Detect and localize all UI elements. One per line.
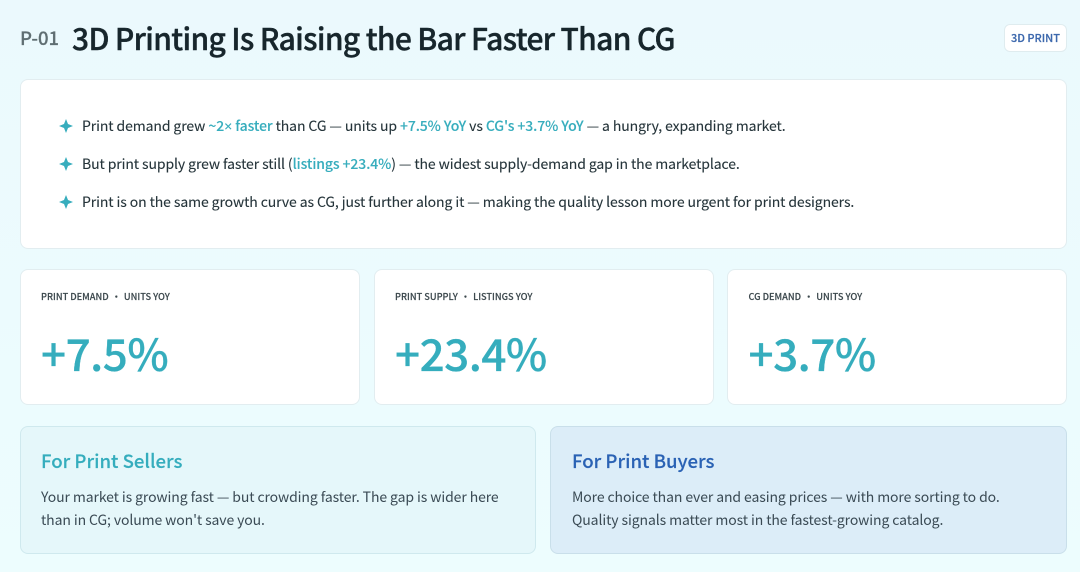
label: CG DEMAND • UNITS YOY xyxy=(748,288,862,302)
panel: key takeaways xyxy=(20,79,1067,249)
panel: for print sellers xyxy=(20,426,536,554)
title: 3D Printing Is Raising the Bar Faster Than CG xyxy=(72,15,675,59)
panel: for print buyers xyxy=(550,426,1067,554)
page code: P-01 xyxy=(20,25,59,51)
bullet 2: But print supply grew faster still (listings +23.4%) — the widest supply-demand gap in the marketplace. xyxy=(82,154,740,174)
body text xyxy=(41,486,499,530)
label: PRINT SUPPLY • LISTINGS YOY xyxy=(395,288,532,302)
bullet 3: Print is on the same growth curve as CG, just further along it — making the quality lesson more urgent for print designers. xyxy=(82,192,854,212)
stat card: print demand xyxy=(20,269,360,405)
value: +23.4% xyxy=(395,320,547,384)
badge: 3D print xyxy=(1004,24,1067,52)
body text: More choice than ever and easing prices — with more sorting to do. xyxy=(572,486,1000,506)
badge: 3D print: 3D PRINT xyxy=(1011,30,1060,46)
stat card: print supply xyxy=(374,269,714,405)
stat card: CG demand xyxy=(727,269,1067,405)
icon: sparkle xyxy=(59,195,73,209)
body text: than in CG; volume won't save you. xyxy=(41,510,265,530)
body text: Quality signals matter most in the fastest-growing catalog. xyxy=(572,510,943,530)
body text: Your market is growing fast — but crowding faster. The gap is wider here xyxy=(41,486,499,506)
bullet 1: Print demand grew ~2× faster than CG — units up +7.5% YoY vs CG's +3.7% YoY — a hungry, expanding market. xyxy=(82,116,786,136)
heading: For Print Sellers xyxy=(41,447,182,474)
value: +3.7% xyxy=(748,320,876,384)
body text xyxy=(572,486,1000,530)
value: +7.5% xyxy=(41,320,168,384)
icon: sparkle xyxy=(59,119,73,133)
heading: For Print Buyers xyxy=(572,447,714,474)
label: PRINT DEMAND • UNITS YOY xyxy=(41,288,170,302)
icon: sparkle xyxy=(59,157,73,171)
